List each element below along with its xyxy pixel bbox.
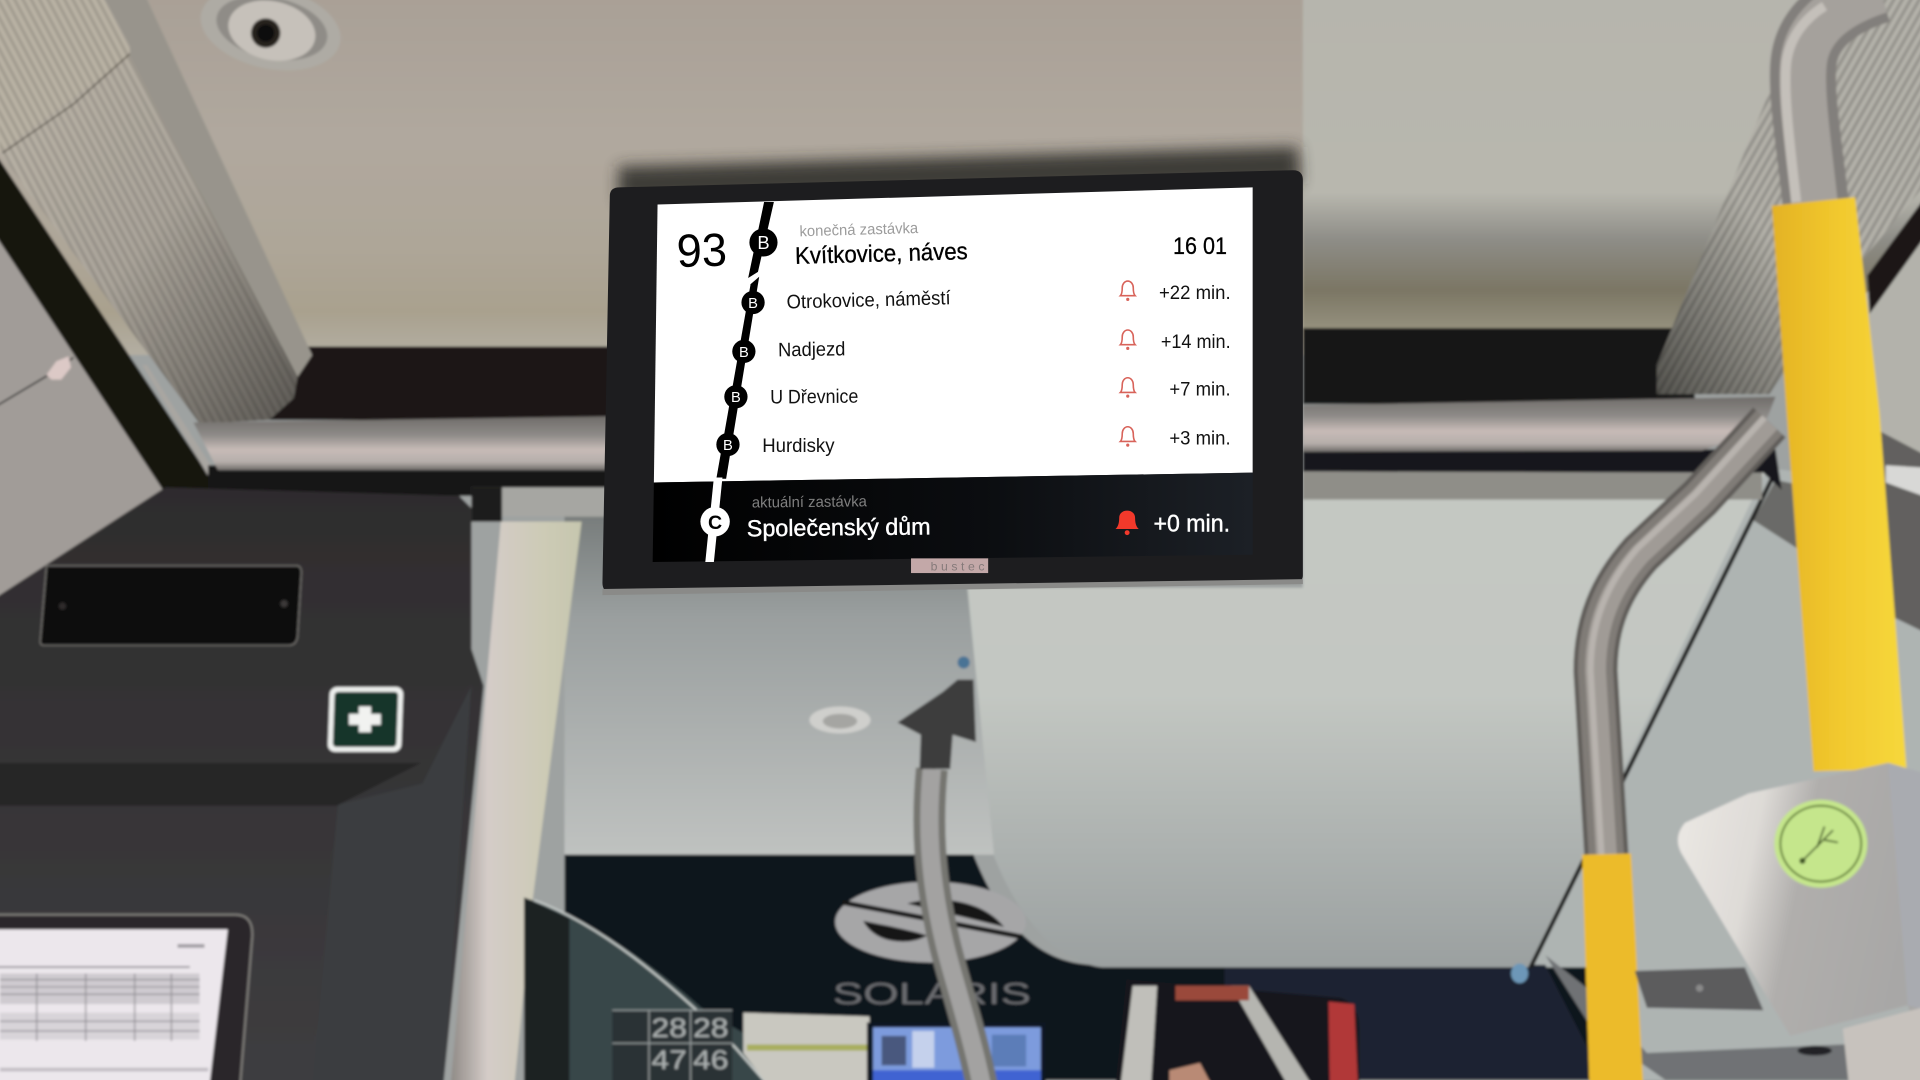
route number: 93: [676, 224, 728, 277]
under-rail left dark strip: [208, 465, 612, 496]
stop row: Nadjezd: B: [739, 345, 749, 361]
left handrail: [193, 416, 610, 470]
right area behind handrail: [1518, 465, 1920, 1080]
bell and delay +3: [1120, 427, 1231, 449]
stop row: Hurdisky: B: [723, 438, 733, 454]
lower ceiling: [564, 490, 994, 855]
brand label: [911, 558, 988, 574]
clock: 16 01: [1173, 233, 1227, 260]
stop row: Otrokovice: B: [748, 296, 758, 312]
lower silver pole under box: [1843, 1007, 1920, 1080]
grey band below right rail: [1303, 470, 1762, 500]
glass partition with seat counter: 46: [693, 1045, 729, 1075]
glass partition with seat counter: 47: [651, 1045, 687, 1075]
stop row: U Dřevnice: [724, 385, 858, 408]
blue clip: [1511, 964, 1528, 983]
bell and delay +3: +3 min.: [1169, 427, 1231, 449]
ceiling camera: [193, 0, 348, 82]
USB charger box: [1678, 763, 1920, 1065]
upper ceiling left part: [0, 0, 1304, 355]
glass partition with seat counter: 28: [651, 1013, 687, 1043]
wire tag on left wall: [0, 356, 73, 405]
panel diagonal black edge: [1531, 471, 1776, 967]
current stop caption: aktuální zastávka: [752, 493, 867, 512]
paper notice behind partition: [743, 1013, 872, 1080]
upper ceiling right part: [1303, 0, 1920, 355]
terminus caption: konečná zastávka: [799, 220, 919, 240]
right handrail: [1303, 397, 1776, 452]
bent silver pole: [1591, 418, 1769, 857]
small video screen: [867, 1022, 1046, 1080]
dark screen footer: [653, 473, 1253, 562]
passenger display monitor: [602, 170, 1303, 595]
bell and delay +7: +7 min.: [1169, 379, 1231, 401]
large light panel: [967, 471, 1766, 967]
solaris logo: SOLARIS: [833, 977, 1031, 1011]
recessed dark window on cabinet: [40, 566, 301, 645]
glass partition with seat counter: [524, 898, 835, 1080]
black bar right: [1303, 328, 1695, 404]
route line: [705, 202, 774, 562]
current stop name: Společenský dům: [747, 513, 931, 541]
glass partition with seat counter: 28: [693, 1013, 729, 1043]
terminus stop marker: B: [757, 232, 770, 253]
yellow lower grip: [1582, 853, 1643, 1080]
right ribbed vent: [1657, 0, 1920, 394]
navy right lower part: [1224, 965, 1604, 1080]
terminus stop marker: [749, 228, 778, 257]
bell and delay +22: [1120, 281, 1231, 304]
left ribbed vent top section: [0, 0, 130, 157]
bell and delay +14: [1120, 330, 1231, 353]
bottom-right grey curve: [1545, 955, 1920, 1080]
pole ceiling mount: [898, 656, 976, 769]
black diagonal strip: [0, 153, 220, 496]
stop row: U Dřevnice: U Dřevnice: [770, 386, 858, 408]
monitor bezel: [602, 170, 1303, 593]
bottom silver edge: [602, 579, 1303, 595]
first aid sign: [328, 687, 403, 752]
small logo at bottom right: [1798, 1046, 1832, 1056]
strip beside lower ceiling: [471, 487, 612, 522]
bell and delay +7: [1120, 378, 1231, 401]
black bar left: [233, 347, 610, 420]
bell and delay +14: +14 min.: [1161, 331, 1231, 353]
monitor shadow on ceiling: [618, 147, 1300, 202]
grey strip at right: [1753, 431, 1920, 633]
upper silver pole: [1786, 0, 1880, 206]
filled alarm bell: [1116, 511, 1139, 535]
timetable frame and paper: [0, 915, 252, 1080]
current delay: +0 min.: [1153, 510, 1230, 537]
black cabinet: [0, 487, 484, 1080]
solaris logo: [833, 882, 1031, 1011]
strip beside vent: [102, 0, 312, 377]
stop row: Otrokovice: Otrokovice, náměstí: [786, 287, 951, 314]
grey cross bar: [1635, 967, 1763, 1010]
navy lower band: [564, 855, 1629, 1080]
black strip below right rail: [1303, 449, 1782, 490]
stop row: Nadjezd: [732, 338, 846, 363]
brand label: bustec: [931, 560, 984, 574]
bell and delay +22: +22 min.: [1159, 282, 1231, 304]
current stop marker: [700, 507, 730, 536]
yellow upper grip: [1772, 197, 1907, 771]
stop row: Hurdisky: Hurdisky: [762, 435, 835, 457]
right wall corner and black strip: [1861, 196, 1920, 490]
white screen area: [654, 187, 1253, 482]
silver edge of black strip: [142, 365, 211, 480]
USB sticker icon: [1774, 800, 1867, 888]
ceiling lamp: [809, 707, 871, 733]
rear view mirror: [1116, 980, 1359, 1080]
stop row: Hurdisky: [716, 433, 835, 457]
stop row: U Dřevnice: B: [731, 390, 741, 406]
left wall panel: [0, 220, 171, 600]
vertical bent pole: [929, 769, 982, 1080]
stop row: Nadjezd: Nadjezd: [778, 338, 846, 361]
terminus name: Kvítkovice, náves: [795, 238, 968, 270]
left ribbed vent: [0, 0, 298, 424]
current stop marker: C: [708, 512, 722, 534]
cream pole: [451, 522, 582, 1080]
